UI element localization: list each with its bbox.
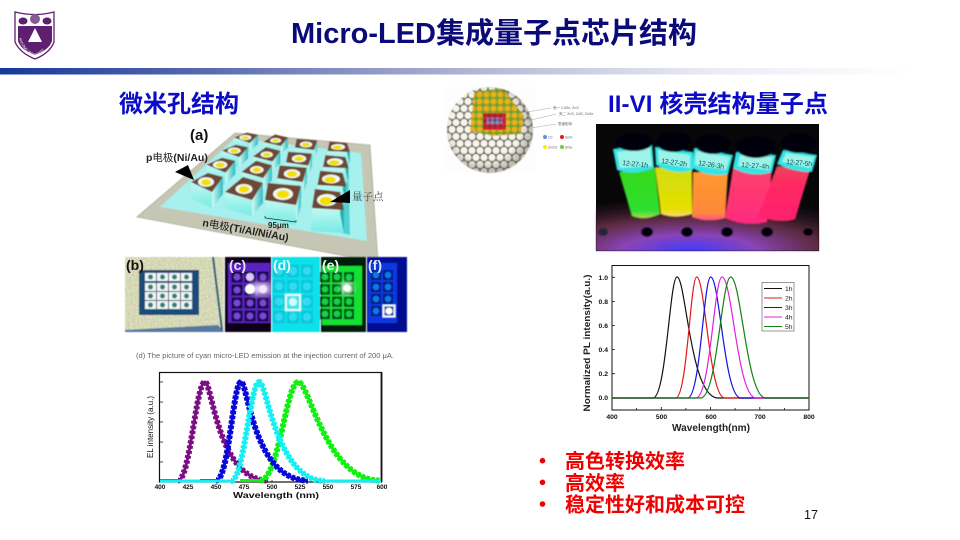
callout lines: [521, 108, 556, 128]
x axis tick labels: 400: [606, 414, 618, 421]
x axis tick labels: [155, 484, 388, 491]
legend: 1h: [785, 286, 793, 293]
callout labels: 表面配体: [558, 121, 573, 126]
handwritten vial labels: 12-27-4h: [741, 162, 769, 171]
label: (c): (c): [229, 257, 246, 273]
legend: 3h: [785, 305, 793, 312]
curve: 2h: [612, 277, 809, 398]
arrow: quantum dot pointer: [330, 190, 350, 203]
university crest logo: NANJING UNIVERSITY: [19, 38, 44, 55]
x axis tick labels: 500: [656, 414, 667, 421]
x axis tick labels: 525: [295, 484, 306, 491]
callout labels: 壳二 ZnS, CdS, ZnSe: [559, 111, 593, 116]
chart: normalized PL spectra: [582, 266, 815, 434]
header gradient bar: [0, 68, 960, 74]
x axis tick labels: 450: [211, 484, 222, 491]
heading: micro-hole structure: 微米孔结构: [119, 91, 239, 118]
x axis tick labels: 800: [803, 414, 815, 421]
curve: 1h: [612, 277, 809, 398]
handwritten vial labels: [622, 158, 812, 171]
x axis tick labels: 600: [705, 414, 717, 421]
diagram: core-shell quantum dot sphere: [445, 87, 593, 173]
photo (b): device under microscope: [125, 257, 224, 332]
bullet list: [540, 449, 745, 516]
curve: cyan 489 nm: [160, 382, 381, 481]
x axis tick labels: 600: [377, 484, 388, 491]
y axis title: Normalized PL intensity(a.u.): [582, 274, 593, 412]
x axis title: Wavelength(nm): [672, 423, 750, 434]
legend: 2h: [785, 296, 793, 302]
x axis tick labels: 575: [351, 484, 362, 491]
x axis tick labels: 550: [323, 484, 334, 491]
y axis tick labels: 0.2: [599, 371, 608, 378]
y axis tick labels: 0.4: [599, 347, 608, 354]
curve: 3h: [612, 277, 809, 398]
bullet list: 稳定性好和成本可控: [565, 492, 745, 516]
bullet list: 高色转换效率: [565, 449, 685, 473]
bullet list: 高效率: [565, 471, 625, 495]
page number: 17: [804, 508, 818, 522]
y axis tick labels: 0.6: [599, 323, 608, 330]
callout labels: [553, 105, 593, 126]
curve: green 525 nm: [240, 382, 380, 480]
label: (e): (e): [322, 257, 339, 273]
x axis tick labels: [606, 414, 815, 421]
legend: element colours: Zn/Cd: [548, 146, 557, 150]
photo: glowing quantum dot vials: [596, 124, 819, 251]
label: p electrode: p电极(Ni/Au): [146, 151, 208, 164]
vial 4 pink: [725, 136, 776, 224]
curve: blue 473 nm: [200, 382, 308, 480]
legend: element colours: [543, 135, 573, 150]
legend: element colours: Se/S: [565, 136, 573, 140]
legend: element colours: S/Se: [565, 146, 572, 150]
label: quantum dots: 量子点: [352, 190, 384, 203]
callout labels: 壳一 CdSe, ZnS: [553, 105, 579, 110]
photo (d): cyan emission: [272, 257, 320, 332]
label: n electrode: n电极(Ti/Al/Ni/Au): [201, 216, 290, 244]
photo (c): violet emission: [225, 257, 271, 332]
handwritten vial labels: 12-26-3h: [698, 160, 725, 171]
curve: 5h: [612, 277, 809, 398]
vial 5 red-pink: [758, 133, 817, 221]
legend: element colours: Cd: [548, 136, 552, 140]
handwritten vial labels: 12-27-5h: [786, 159, 812, 168]
chart: EL spectra: [145, 372, 388, 500]
curve: 4h: [612, 277, 809, 398]
photo (f): blue emission: [367, 257, 407, 332]
title: Micro-LED集成量子点芯片结构: [291, 17, 697, 50]
y axis tick labels: 0.8: [599, 299, 608, 306]
legend: 5h: [785, 324, 793, 331]
label: (f): (f): [368, 257, 382, 273]
y axis title: EL intensity (a.u.): [145, 396, 155, 458]
x axis tick labels: 400: [155, 484, 166, 491]
x axis tick labels: 700: [754, 414, 766, 421]
legend: 4h: [785, 314, 793, 322]
university crest logo: [14, 11, 55, 60]
heading: II-VI core-shell quantum dots: II-VI 核壳结构量子点: [608, 91, 828, 118]
label: (a): (a): [190, 127, 208, 144]
caption under photos: (d) The picture of cyan micro-LED emission at the injection current of 200 μA.: [136, 351, 394, 360]
vial 3 orange: [692, 134, 733, 220]
x axis tick labels: 500: [267, 484, 278, 491]
label: 95 micrometre dimension: 95μm: [268, 221, 289, 230]
arrow: p electrode pointer: [175, 165, 194, 180]
diagram: micro-LED array (a): [137, 127, 384, 262]
label: (b): (b): [126, 257, 144, 273]
y axis tick labels: 0.0: [599, 395, 608, 402]
photo (e): green emission: [319, 257, 366, 332]
x axis tick labels: 475: [239, 484, 250, 491]
x axis tick labels: 425: [183, 484, 194, 491]
legend: [762, 282, 794, 331]
y axis tick labels: 1.0: [599, 275, 608, 282]
handwritten vial labels: 12-27-2h: [661, 158, 688, 169]
vial 2 yellow: [655, 132, 693, 216]
label: (d): (d): [273, 257, 291, 273]
curve: violet 440 nm: [160, 382, 268, 480]
y axis tick labels: [599, 275, 608, 402]
x axis title: Wavelength (nm): [233, 490, 319, 500]
handwritten vial labels: 12-27-1h: [622, 160, 648, 170]
vial 1 green: [613, 133, 660, 218]
label: 95 micrometre dimension: [265, 216, 296, 230]
